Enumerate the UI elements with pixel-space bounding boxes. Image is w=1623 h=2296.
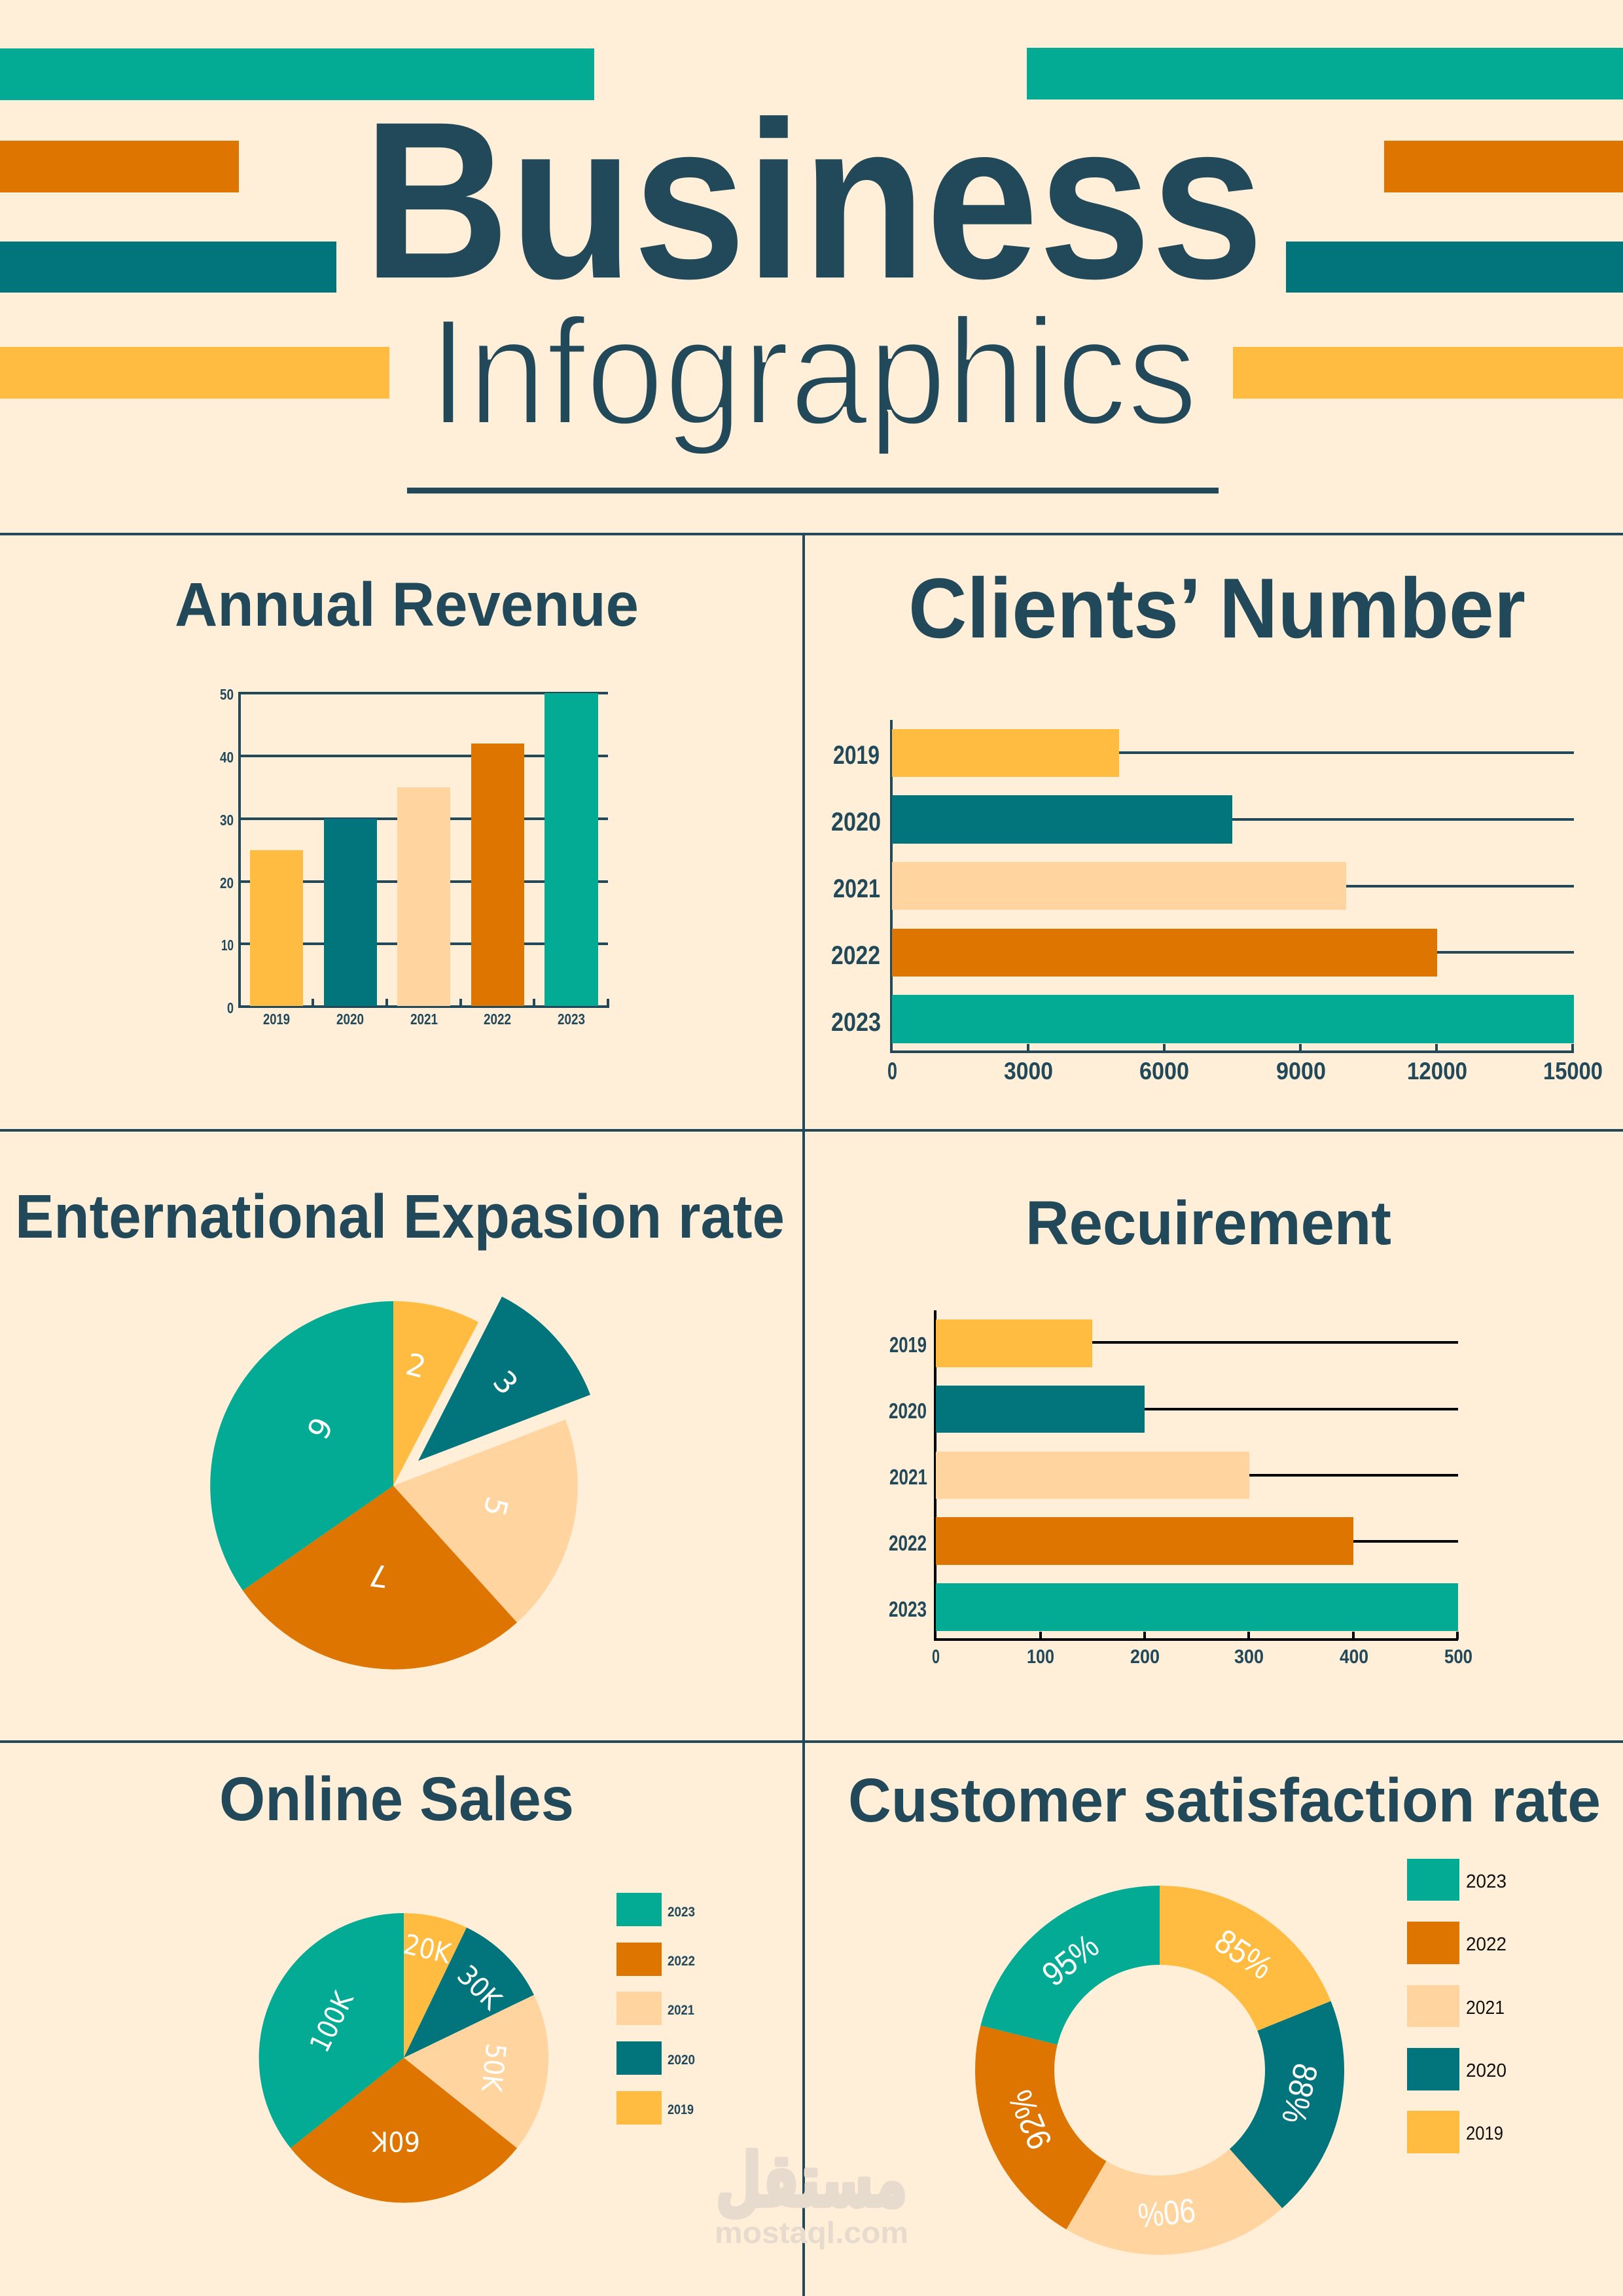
- decorative bar: right dark teal: [1286, 242, 1623, 293]
- watermark: mostaql: مستقل: [716, 2138, 907, 2223]
- x axis labels: 200: [1130, 1646, 1160, 1668]
- decorative bar: left yellow: [0, 347, 389, 399]
- slice: 100K: [259, 1913, 404, 2148]
- y axis labels: 2021: [889, 1465, 927, 1489]
- bar: 2020: [936, 1386, 1145, 1433]
- legend item: 2021: [1407, 1985, 1505, 2027]
- heading: International Expasion rate: Enternational Expasion rate: [15, 1182, 785, 1251]
- bar: 2021: [397, 787, 450, 1006]
- decorative bar: left dark teal: [0, 242, 336, 293]
- x axis labels: [932, 1646, 1472, 1668]
- value labels: 20K: [401, 1928, 455, 1970]
- x axis labels: 15000: [1543, 1058, 1603, 1085]
- x axis labels: [263, 1011, 585, 1028]
- pie chart: online sales: [259, 1913, 548, 2202]
- subtitle: Infographics: Infographics: [429, 287, 1198, 457]
- y axis labels: 2020: [831, 808, 881, 836]
- value labels: 9: [300, 1412, 340, 1445]
- bar: 2022: [471, 744, 524, 1006]
- heading: Recuirement: Recuirement: [1026, 1189, 1391, 1258]
- bar: 2019: [892, 729, 1119, 777]
- legend item: 2019: [616, 2091, 694, 2125]
- heading: Online Sales: Online Sales: [219, 1765, 574, 1834]
- y axis labels: [220, 686, 234, 1016]
- value labels: 88%: [1274, 2060, 1325, 2127]
- slice: 90%: [1066, 2149, 1282, 2255]
- legend item: 2022: [1407, 1922, 1507, 1964]
- value labels: 92%: [1001, 2085, 1060, 2155]
- bar: 2022: [892, 929, 1437, 977]
- value labels: 30K: [451, 1959, 508, 2017]
- x axis labels: 2022: [484, 1011, 511, 1028]
- decorative bar: right yellow: [1233, 347, 1623, 399]
- bar: 2021: [892, 862, 1346, 910]
- slice: 60K: [291, 2058, 517, 2202]
- slice: 85%: [1160, 1886, 1331, 2031]
- x axis labels: 3000: [1004, 1058, 1053, 1085]
- slice: 95%: [980, 1886, 1160, 2045]
- x axis labels: 400: [1340, 1646, 1368, 1668]
- legend item: 2020: [616, 2041, 695, 2075]
- legend item: 2023: 2023: [668, 1905, 695, 1920]
- watermark: mostaql: [715, 2138, 908, 2250]
- legend item: 2020: [1407, 2048, 1507, 2090]
- bar: 2019: [250, 850, 303, 1006]
- x axis labels: 0: [932, 1646, 940, 1668]
- legend item: 2023: [616, 1893, 695, 1926]
- legend item: 2021: 2021: [668, 2003, 694, 2018]
- watermark: mostaql: mostaql.com: [715, 2215, 908, 2250]
- bar chart: annual revenue: [220, 686, 609, 1028]
- bar: 2022: [936, 1517, 1353, 1565]
- bar: 2023: [544, 693, 598, 1006]
- slice: 9: [210, 1301, 393, 1590]
- panel: international expansion rate: [15, 1182, 785, 1670]
- legend item: 2019: [1407, 2111, 1503, 2153]
- panel: customer satisfaction rate: [848, 1766, 1601, 2255]
- y axis labels: 10: [221, 937, 234, 954]
- slice: 92%: [975, 2026, 1106, 2229]
- decorative bar: right teal: [1027, 48, 1623, 99]
- value labels: [1001, 1922, 1325, 2234]
- value labels: 3: [486, 1363, 525, 1401]
- slice: 30K: [404, 1928, 534, 2058]
- y axis labels: 2022: [831, 941, 880, 970]
- slice: 7: [243, 1486, 517, 1670]
- x axis labels: 6000: [1139, 1058, 1189, 1085]
- legend item: 2021: 2021: [1466, 1998, 1505, 2018]
- bar: 2023: [936, 1583, 1458, 1631]
- slice: 50K: [404, 1995, 548, 2148]
- decorative bar: right orange: [1384, 141, 1623, 192]
- x axis labels: [887, 1058, 1603, 1085]
- bar: 2021: [936, 1452, 1249, 1499]
- legend item: 2020: 2020: [1466, 2060, 1507, 2081]
- legend item: 2022: [616, 1943, 695, 1976]
- legend: online sales: [616, 1893, 695, 2125]
- bar: 2019: [936, 1319, 1092, 1367]
- legend item: 2022: 2022: [1466, 1934, 1507, 1955]
- horizontal bar chart: recruitment: [889, 1310, 1472, 1668]
- legend item: 2019: 2019: [668, 2102, 694, 2117]
- y axis labels: 2022: [889, 1531, 927, 1555]
- value labels: 5: [476, 1493, 515, 1520]
- x axis labels: 500: [1444, 1646, 1472, 1668]
- value labels: [300, 1346, 525, 1594]
- heading: Annual Revenue: Annual Revenue: [175, 570, 639, 639]
- legend item: 2022: 2022: [668, 1954, 695, 1969]
- y axis labels: 2023: [831, 1008, 881, 1037]
- header: [0, 48, 1623, 493]
- slice: 5: [393, 1420, 578, 1623]
- x axis labels: 2020: [336, 1011, 364, 1028]
- slice: 2: [393, 1301, 478, 1486]
- panel: online sales: [219, 1765, 695, 2202]
- value labels: 50K: [475, 2042, 512, 2094]
- y axis labels: [831, 741, 881, 1037]
- x axis labels: 300: [1234, 1646, 1264, 1668]
- decorative bar: left teal: [0, 48, 594, 100]
- x axis labels: 2019: [263, 1011, 290, 1028]
- legend item: 2020: 2020: [668, 2053, 695, 2068]
- y axis labels: [889, 1333, 927, 1621]
- heading: Customer satisfaction rate: Customer satisfaction rate: [848, 1766, 1601, 1835]
- title underline: [407, 488, 1219, 493]
- y axis labels: 2023: [889, 1597, 927, 1621]
- panel: annual revenue: [175, 570, 639, 1028]
- value labels: 7: [367, 1557, 391, 1594]
- x axis labels: 12000: [1407, 1058, 1467, 1085]
- legend item: 2021: [616, 1992, 694, 2025]
- title: Business: Business: [363, 75, 1264, 325]
- value labels: [303, 1928, 512, 2157]
- y axis labels: 20: [220, 874, 234, 891]
- y axis labels: 2019: [889, 1333, 927, 1357]
- heading: Clients' Number: Clients’ Number: [908, 560, 1525, 656]
- value labels: 85%: [1208, 1922, 1279, 1987]
- panel: recruitment: [889, 1189, 1472, 1668]
- y axis labels: 0: [227, 999, 234, 1016]
- legend item: 2019: 2019: [1466, 2123, 1503, 2144]
- value labels: 60K: [371, 2125, 420, 2157]
- value labels: 95%: [1035, 1927, 1106, 1994]
- slice: 20K: [404, 1913, 467, 2058]
- panel: clients number: [831, 560, 1603, 1085]
- x axis labels: 2023: [558, 1011, 585, 1028]
- bar: 2020: [324, 819, 377, 1006]
- donut chart: customer satisfaction: [975, 1886, 1344, 2255]
- y axis labels: 2019: [833, 741, 880, 770]
- pie chart: international expansion: [210, 1297, 590, 1670]
- x axis labels: 100: [1027, 1646, 1054, 1668]
- legend item: 2023: 2023: [1466, 1871, 1507, 1892]
- value labels: 90%: [1136, 2191, 1198, 2234]
- legend item: 2023: [1407, 1859, 1507, 1901]
- bar: 2023: [892, 995, 1574, 1043]
- decorative bar: left orange: [0, 141, 239, 192]
- x axis labels: 9000: [1276, 1058, 1326, 1085]
- x axis labels: 0: [887, 1058, 897, 1085]
- y axis labels: 30: [220, 812, 234, 829]
- y axis labels: 50: [220, 686, 234, 703]
- x axis labels: 2021: [410, 1011, 438, 1028]
- value labels: 100K: [303, 1986, 360, 2057]
- slice: 88%: [1230, 2001, 1344, 2208]
- y axis labels: 40: [220, 749, 234, 766]
- legend: customer satisfaction: [1407, 1859, 1507, 2153]
- y axis labels: 2021: [833, 874, 880, 903]
- bar: 2020: [892, 795, 1232, 844]
- slice: 3 exploded: [418, 1297, 590, 1461]
- horizontal bar chart: clients: [831, 720, 1603, 1085]
- y axis labels: 2020: [889, 1399, 927, 1423]
- value labels: 2: [402, 1346, 430, 1385]
